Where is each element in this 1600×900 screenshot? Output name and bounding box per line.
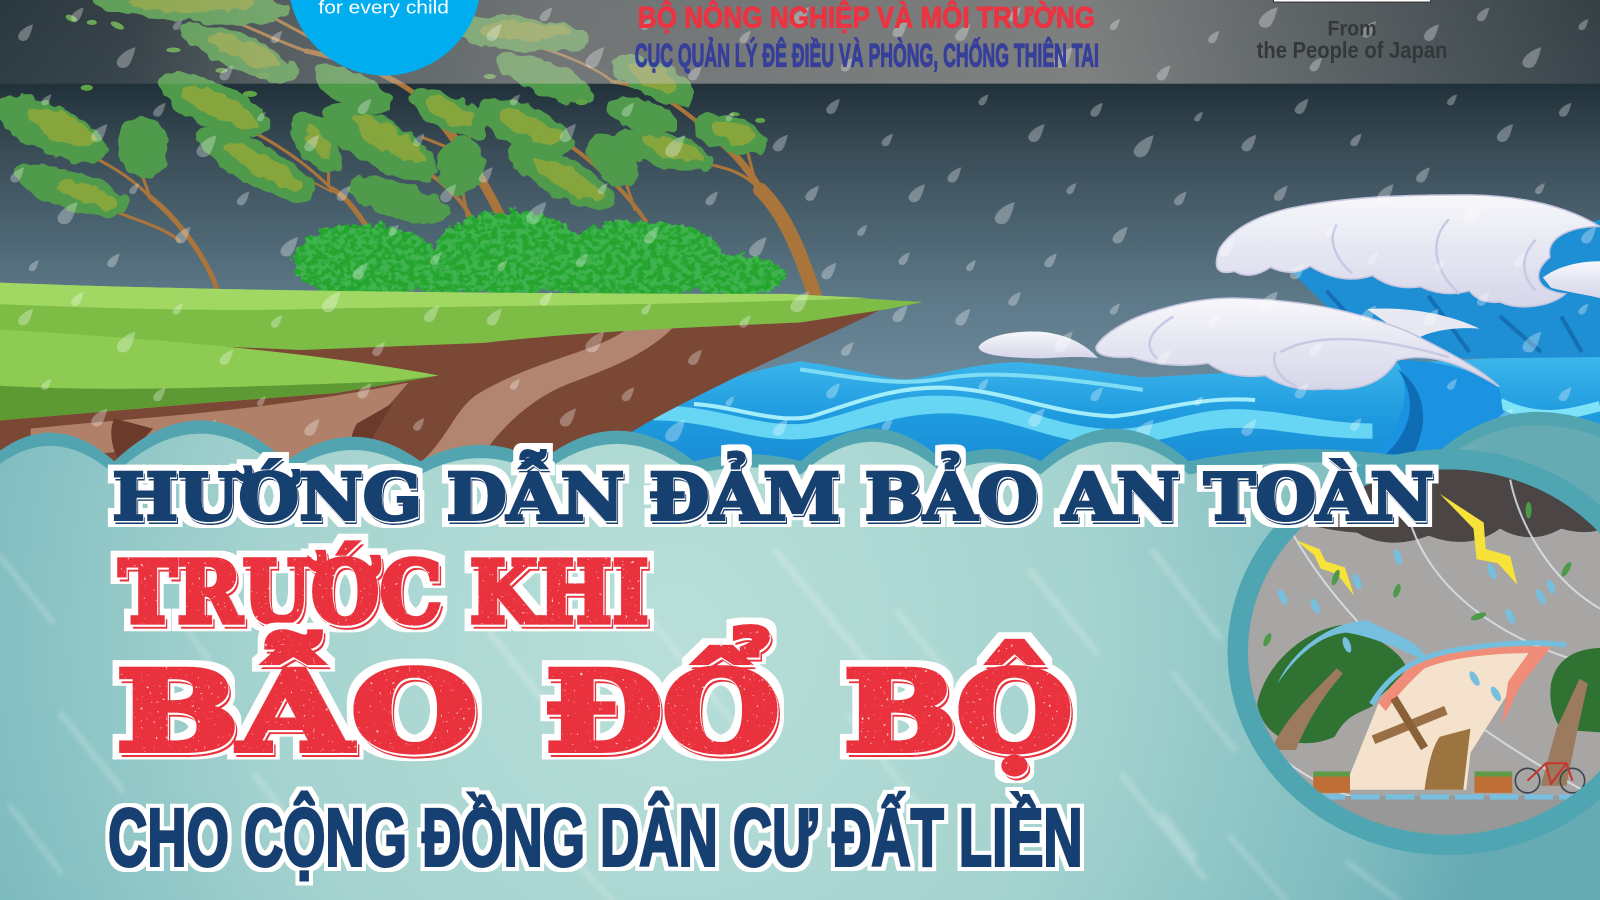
grassy cliff [0,283,923,480]
title line four: CHO CỘNG ĐỒNG DÂN CƯ ĐẤT LIỀN [108,792,1083,883]
panel body [0,425,1600,900]
salmon roof edge [1379,646,1551,724]
from the people of japan credit: the People of Japan [1257,37,1447,63]
from the people of japan credit: From [1328,17,1377,41]
puddle strip [1316,794,1600,799]
japan flag box edge [1273,0,1431,2]
blown-off roof house wall [1344,646,1551,790]
rear wave body [1290,219,1600,359]
rock dark crack [111,403,393,464]
right flower planter [1474,771,1512,793]
pale foam lines [694,388,1255,418]
storm scene roundel [1238,459,1600,857]
tree trunks and branches [59,8,814,294]
flying leaves [65,13,765,123]
lightning bolts [1440,494,1517,585]
right tree trunk [1541,679,1588,786]
green bushes [292,211,786,298]
title line three [116,627,1072,776]
front wave curl [1371,360,1510,454]
wooden cross beam [1373,710,1446,740]
left tree trunk [1271,668,1343,750]
roof blue rain edge [1371,643,1566,704]
diagonal rain streaks [0,551,1398,900]
lower grass shade [0,376,439,420]
dark storm cloud [1318,469,1598,543]
lower grass shelf [0,330,439,420]
rear wave stripes [1327,291,1582,352]
rock highlights [418,321,679,464]
breaking waves [979,195,1600,454]
title line one: HƯỚNG DẪN ĐẢM BẢO AN TOÀN [112,450,1434,535]
bicycle [1515,763,1585,793]
sea water [531,352,1600,480]
cliff rock [0,310,880,480]
upper grass [0,283,923,350]
stormy sky background [0,0,1600,480]
right bent tree foliage [1550,648,1600,735]
ministry name: BỘ NÔNG NGHIỆP VÀ MÔI TRƯỜNG [638,1,1095,35]
front wave rear hump [1367,309,1480,342]
ground [1330,796,1566,834]
from the people of japan credit [1257,17,1447,63]
title line three: BỘ [844,641,1072,776]
rear wave foam shading [1333,219,1536,294]
rear wave foam cap [1216,195,1600,307]
front wave foam cap [1096,298,1499,390]
title line three: BẪO [116,632,478,776]
department name: CỤC QUẢN LÝ ĐÊ ĐIỀU VÀ PHÒNG, CHỐNG THIÊN TAI [635,35,1099,73]
roundel grey sky [1247,468,1600,836]
roundel teal ring [1238,459,1600,845]
wooden upright beam [1394,698,1424,748]
unicef logo disc [288,0,482,76]
small foam crest [979,332,1098,358]
rain drops [0,0,1600,449]
left bent tree foliage [1257,624,1406,743]
grass highlight [0,283,867,310]
title line two: TRƯỚC KHI [118,541,649,643]
left tree snow edge [1278,620,1427,684]
wooden door [1424,729,1470,790]
semi-transparent header band [0,0,1600,84]
left flower planter [1313,771,1350,793]
title line three: ĐỔ [545,627,780,776]
panel teal rim [0,412,1600,900]
rear wave second curl [1543,261,1600,298]
cyan foam band [653,396,1372,445]
wind lines [1288,479,1600,796]
scalloped water panel [0,412,1600,900]
rock lower light face [31,383,408,465]
front wave foam shading [1150,316,1449,386]
wind-bent trees [0,0,814,294]
flying leaves and drops [1262,502,1573,648]
tree foliage [0,0,767,229]
front wave dark stripes [1386,369,1423,454]
roundel clipped scene [1257,469,1600,834]
